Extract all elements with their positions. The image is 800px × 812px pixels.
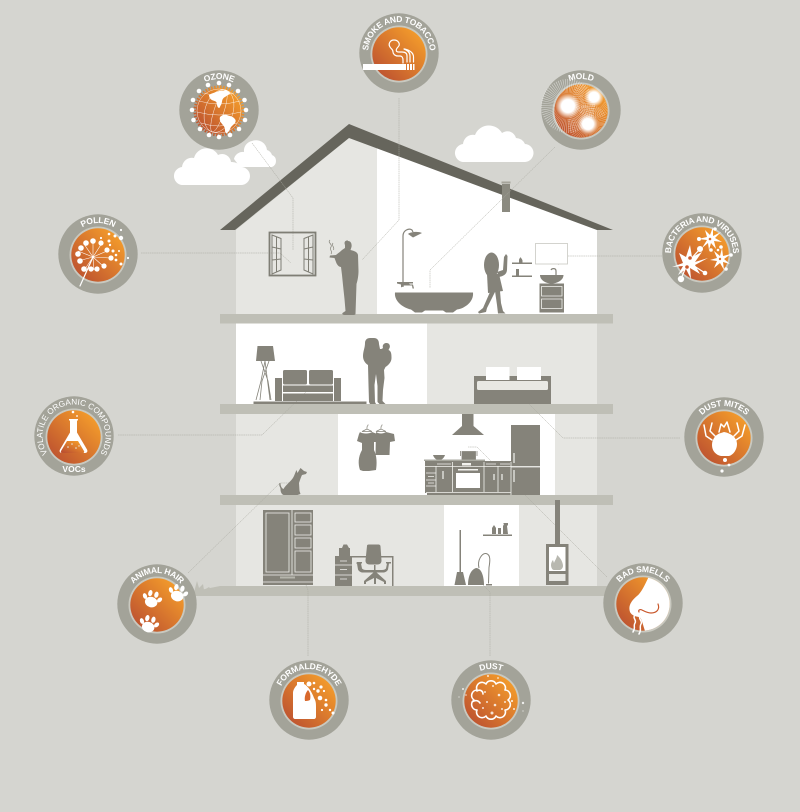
room: closet (444, 505, 519, 586)
fridge (511, 425, 540, 495)
room: bedroom (427, 323, 597, 404)
label: VOCs: VOCs (62, 464, 86, 474)
office chair (356, 544, 391, 584)
badge: dust (451, 660, 531, 740)
icon: nose (629, 576, 673, 634)
label: DUST MITES (698, 400, 750, 415)
icon: mite (704, 422, 745, 473)
badge: formaldehyde (269, 660, 349, 740)
ground slab (197, 586, 610, 596)
floor lamp (256, 346, 275, 400)
cigarette smoke (329, 240, 334, 254)
floor slab 1 (220, 314, 613, 324)
floor slab 2 (220, 404, 613, 414)
wall: top floor light (236, 138, 377, 314)
badge: animal hair (117, 564, 197, 644)
cloud: right (455, 125, 534, 162)
badge: mold (541, 70, 621, 150)
desk with printer (335, 544, 394, 586)
icon: cigarette (363, 40, 414, 70)
icon: globe (190, 81, 248, 139)
window shutter right (304, 235, 313, 274)
cloud: left (174, 148, 250, 185)
bed (474, 367, 551, 404)
hair (484, 252, 499, 278)
t-shirt (376, 432, 395, 455)
shower and bathtub (395, 229, 473, 312)
room: stove room (519, 505, 597, 586)
shower head (408, 232, 422, 238)
sofa (254, 370, 366, 404)
hangers (362, 424, 386, 432)
wood stove (546, 500, 568, 585)
mother and child (363, 338, 392, 404)
range hood (452, 414, 484, 435)
icon: mold spores (548, 81, 610, 139)
house (193, 124, 613, 596)
clouds (174, 125, 534, 185)
label: MOLD (568, 73, 594, 81)
tub (395, 292, 473, 312)
label: BAD SMELLS (616, 566, 670, 582)
icon: bottle (293, 682, 334, 719)
badge: bacteria and viruses (662, 213, 742, 293)
room: office (236, 505, 444, 586)
kitchen lines (425, 462, 540, 495)
room: living room (236, 323, 427, 404)
ozone dots (190, 81, 248, 139)
man smoking (329, 240, 358, 315)
badge: smoke and tobacco (359, 13, 439, 93)
vacuum cleaner (468, 553, 492, 586)
oven window (456, 473, 480, 488)
icon: dandelion (75, 229, 129, 286)
grass (193, 581, 220, 596)
clothes on hangers (357, 424, 395, 471)
chimney (502, 182, 510, 212)
label: POLLEN (80, 217, 116, 227)
room: laundry side (236, 414, 338, 495)
broom (454, 530, 466, 585)
label: OZONE (204, 73, 235, 82)
kitchen base (427, 493, 540, 495)
badge: bad smells (603, 563, 683, 643)
shower taps (397, 282, 414, 288)
kitchen (424, 425, 540, 495)
dress (357, 432, 380, 471)
icon: dust cloud (458, 675, 524, 719)
room: kitchen (338, 414, 555, 495)
wardrobe (263, 510, 313, 585)
bathroom shelves (512, 258, 532, 277)
girl (478, 252, 508, 314)
flame (551, 555, 563, 570)
icon: flask (60, 411, 87, 453)
window shutter left (272, 235, 281, 274)
label: BACTERIA AND VIRUSES (665, 216, 739, 254)
rug (254, 402, 366, 404)
cabinets (425, 461, 511, 493)
cloud: behind ozone (234, 140, 276, 167)
sink cabinet (540, 269, 564, 312)
wall: top floor white (377, 148, 597, 314)
badge: ozone (179, 70, 259, 150)
floor slab 3 (220, 495, 613, 505)
roof (220, 124, 613, 230)
label: SMOKE AND TOBACCO (362, 16, 436, 50)
bowl (433, 455, 445, 460)
label: DUST (479, 663, 504, 671)
room: kitchen side (555, 414, 597, 495)
pot (460, 451, 477, 460)
icon: microbes (672, 227, 733, 282)
label: FORMALDEHYDE (276, 663, 342, 686)
badge: dust mites (684, 397, 764, 477)
mattress (477, 381, 548, 390)
connector lines (118, 98, 680, 656)
badge: pollen (58, 214, 138, 294)
continents (209, 90, 236, 133)
dog (279, 468, 307, 495)
pillows (486, 367, 510, 380)
dress (487, 274, 503, 293)
cleaning shelf (483, 523, 512, 536)
icon: paw prints (136, 582, 191, 635)
mirror (536, 244, 568, 264)
shower pole (403, 229, 413, 287)
raised arm and legs (478, 254, 508, 314)
label: VOLATILE ORGANIC COMPOUNDS (36, 398, 112, 456)
printer (339, 544, 350, 556)
label: ANIMAL HAIR (131, 567, 184, 584)
badge: VOCs (34, 396, 114, 476)
counter top (424, 460, 485, 461)
window (270, 232, 316, 276)
